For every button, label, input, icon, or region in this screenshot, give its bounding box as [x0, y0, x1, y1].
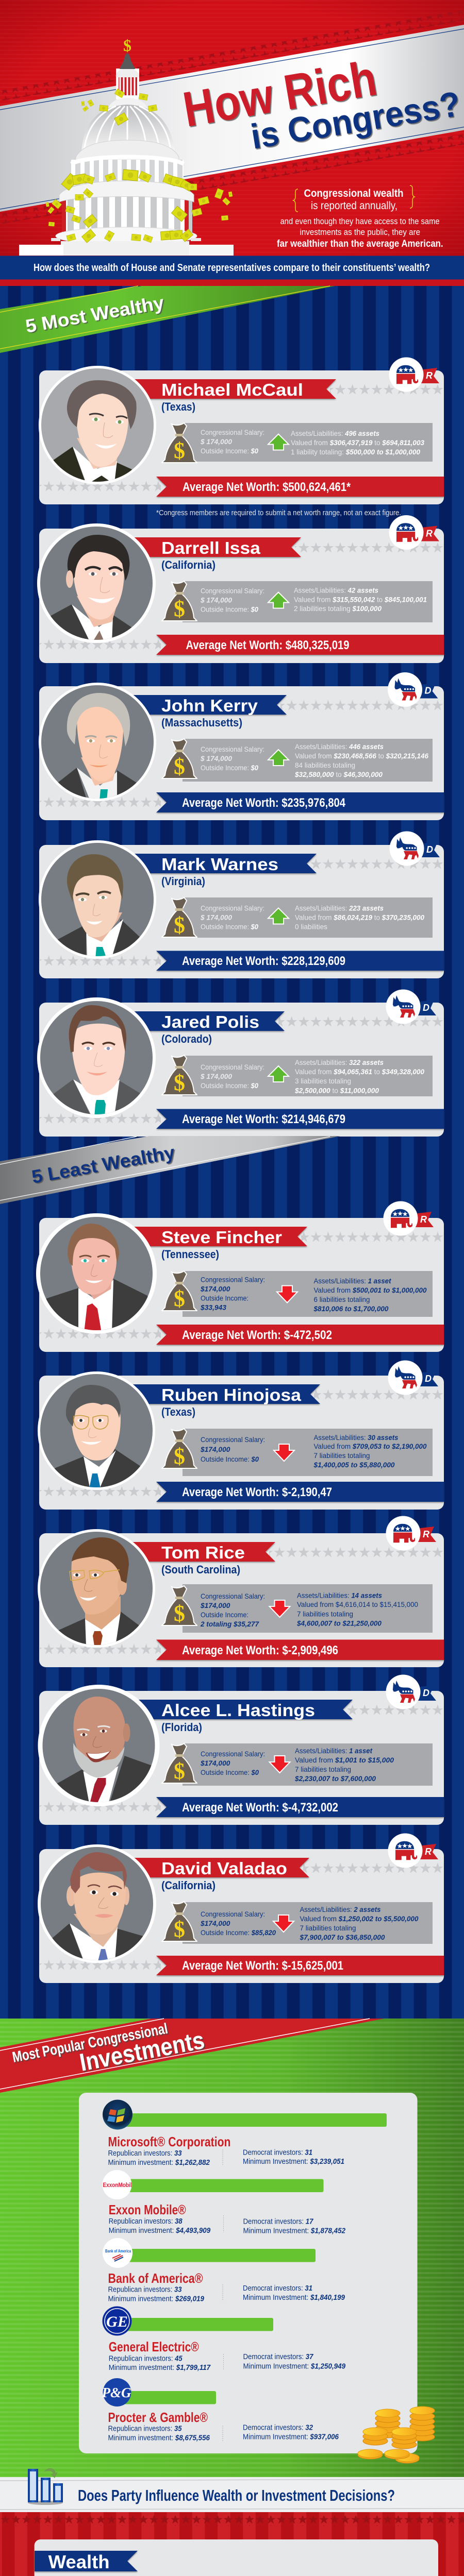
name banner	[131, 1700, 353, 1720]
logo: Bank of America	[103, 2238, 132, 2268]
state: (Texas)	[161, 400, 195, 413]
portrait	[36, 363, 159, 487]
logo: GE	[102, 2306, 132, 2336]
name banner	[131, 695, 287, 715]
net worth banner	[156, 1482, 444, 1502]
green investments section background	[0, 2019, 464, 2477]
intro text block: Congressional wealth	[304, 188, 403, 199]
diagonal white title banner	[0, 25, 464, 212]
info panel: Outside Income: $0	[201, 605, 258, 613]
company: Bank of America: Minimum Investment: $1,840,199	[243, 2293, 345, 2302]
info panel: 0 liabilities	[295, 922, 327, 930]
info panel	[162, 1584, 433, 1633]
company: Microsoft	[103, 2100, 387, 2167]
info panel: Congressional Salary:	[201, 904, 264, 912]
party badge: D	[423, 1003, 429, 1013]
info panel: $7,900,007 to $36,850,000	[300, 1933, 385, 1941]
company: Exxon Mobile: Minimum investment: $4,493,909	[109, 2226, 211, 2235]
info panel: $1,400,005 to $5,880,000	[313, 1461, 395, 1469]
state: (Texas)	[161, 1405, 195, 1418]
party badge	[386, 1674, 436, 1709]
info panel: Valued from $1,001 to $15,000	[295, 1756, 394, 1764]
company: Microsoft: Microsoft® Corporation	[108, 2134, 231, 2149]
info panel: $ 174,000	[200, 437, 232, 446]
info panel	[162, 423, 433, 463]
info panel: 3 liabilities totaling	[295, 1077, 351, 1085]
ribbon: Most Popular Congressional Investments: Most Popular Congressional	[11, 2021, 169, 2066]
net worth banner	[156, 477, 444, 497]
portrait	[37, 1684, 161, 1807]
name banner: Mark Warnes	[161, 855, 278, 874]
name banner: Alcee L. Hastings	[161, 1701, 315, 1720]
card: Jared Polis	[35, 989, 444, 1137]
info panel: $174,000	[200, 1445, 230, 1453]
party badge	[384, 1201, 434, 1235]
info panel: Valued from $1,250,002 to $5,500,000	[300, 1914, 419, 1923]
info panel: $4,600,007 to $21,250,000	[296, 1619, 382, 1627]
logo: P&G	[101, 2378, 131, 2406]
info panel: Outside Income: $0	[201, 922, 258, 930]
net worth banner: Average Net Worth: $-2,909,496	[182, 1643, 338, 1657]
info panel: 1 liability totaling: $500,000 to $1,000,000	[291, 448, 420, 456]
title	[179, 50, 463, 157]
info panel: Assets/Liabilities: 42 assets	[294, 586, 378, 595]
title: How Rich	[179, 50, 380, 138]
net worth banner	[156, 1797, 444, 1817]
card: Darrell Issa	[35, 515, 444, 663]
party badge	[388, 672, 438, 707]
net worth banner	[156, 1109, 444, 1129]
logo: ExxonMobil	[102, 2170, 132, 2199]
party badge: R	[420, 1214, 427, 1225]
state: (Colorado)	[161, 1032, 212, 1045]
info panel	[162, 739, 433, 782]
ribbon: 5 Least Wealthy: 5 Least Wealthy	[30, 1142, 176, 1188]
info panel: 84 liabilities totaling	[295, 761, 355, 769]
company: Exxon Mobile	[102, 2170, 346, 2235]
card: Ruben Hinojosa	[35, 1360, 444, 1510]
company: Procter & Gamble	[101, 2378, 339, 2442]
party badge	[390, 832, 440, 866]
party badge: D	[425, 1374, 432, 1384]
ribbon: 5 Most Wealthy: 5 Most Wealthy	[24, 292, 165, 337]
info panel: Valued from $306,437,919 to $694,811,003	[291, 438, 424, 447]
company: Exxon Mobile: Democrat investors: 17	[243, 2217, 313, 2226]
info panel: Valued from $86,024,219 to $370,235,000	[295, 913, 424, 921]
info panel: Congressional Salary:	[201, 1592, 265, 1600]
logo: P&G: P&G	[101, 2385, 131, 2400]
info panel: Assets/Liabilities: 1 asset	[295, 1747, 373, 1755]
info panel: $810,006 to $1,700,000	[313, 1304, 389, 1313]
party badge: D	[425, 685, 431, 696]
net worth banner: Average Net Worth: $-472,502	[182, 1328, 332, 1342]
state: (Massachusetts)	[161, 716, 242, 729]
info panel: Congressional Salary:	[201, 1063, 264, 1071]
info panel: $174,000	[200, 1601, 230, 1609]
question bar	[0, 256, 464, 286]
party badge	[386, 989, 436, 1024]
info panel	[162, 897, 433, 938]
info panel: $2,500,000 to $11,000,000	[294, 1086, 379, 1094]
company: Bank of America: Bank of America®	[108, 2270, 203, 2286]
illustration: gold coins	[358, 2406, 435, 2463]
illustration: capitol dome with money	[19, 36, 234, 256]
company: Procter & Gamble: Democrat investors: 32	[243, 2424, 313, 2432]
logo: ExxonMobil: ExxonMobil	[103, 2181, 132, 2189]
info panel: 7 liabilities totaling	[300, 1924, 356, 1932]
portrait	[35, 1842, 159, 1965]
net worth banner	[156, 1325, 444, 1345]
company: General Electric: Minimum Investment: $1,250,949	[243, 2362, 346, 2371]
info panel: Outside Income: $0	[201, 447, 258, 455]
info panel: Outside Income: $85,820	[201, 1928, 276, 1937]
party badge	[388, 1360, 438, 1395]
info panel: 2 liabilities totaling $100,000	[294, 604, 382, 613]
name banner	[131, 1227, 307, 1247]
net worth banner	[156, 951, 444, 971]
company: Microsoft: Republican investors: 33	[108, 2149, 182, 2158]
company: Microsoft: Minimum Investment: $3,239,051	[243, 2157, 344, 2166]
info panel: Valued from $500,001 to $1,000,000	[313, 1286, 427, 1294]
info panel: Assets/Liabilities: 446 assets	[295, 742, 384, 751]
party badge: R	[425, 1846, 432, 1857]
company: Exxon Mobile: Exxon Mobile®	[109, 2202, 186, 2217]
name banner	[131, 537, 301, 557]
name banner	[131, 1858, 309, 1878]
star row above banner	[0, 10, 464, 102]
info panel: Congressional Salary:	[201, 586, 264, 595]
info panel: 6 liabilities totaling	[313, 1295, 370, 1303]
state: (Tennessee)	[161, 1248, 219, 1261]
name banner: David Valadao	[161, 1859, 287, 1878]
name banner: Steve Fincher	[161, 1228, 282, 1247]
card: Alcee L. Hastings	[37, 1674, 444, 1825]
name banner: Michael McCaul	[161, 380, 303, 399]
info panel: Assets/Liabilities: 496 assets	[291, 429, 379, 437]
company: General Electric: Democrat investors: 37	[243, 2352, 313, 2361]
logo: Microsoft	[103, 2100, 132, 2130]
party badge: D	[423, 1688, 429, 1698]
info panel: Valued from $230,468,566 to $320,215,146	[295, 752, 428, 760]
net worth banner: Average Net Worth: $-15,625,001	[182, 1959, 343, 1973]
state: (Florida)	[161, 1721, 202, 1734]
info panel: $ 174,000	[200, 913, 232, 921]
ribbon: 5 Least Wealthy	[0, 1136, 340, 1204]
info panel: $ 174,000	[200, 1072, 232, 1080]
info panel	[162, 1743, 433, 1786]
info panel	[162, 581, 433, 622]
company: Exxon Mobile: Republican investors: 38	[109, 2217, 183, 2226]
company: Bank of America: Minimum investment: $269,019	[108, 2295, 205, 2303]
info panel: Congressional Salary:	[201, 1910, 265, 1918]
name banner	[131, 1384, 320, 1404]
portrait	[36, 838, 159, 961]
party badge: R	[426, 529, 433, 539]
card: John Kerry	[36, 672, 444, 820]
intro text block: investments as the public, they are	[300, 227, 420, 237]
icon: blue bar chart	[28, 2468, 63, 2505]
info panel: $2,230,007 to $7,600,000	[294, 1774, 376, 1783]
ribbon: Most Popular Congressional Investments: Investments	[77, 2027, 207, 2077]
portrait	[35, 996, 158, 1120]
star row below banner	[0, 133, 464, 225]
card: Tom Rice	[35, 1516, 444, 1667]
info panel: $174,000	[200, 1919, 230, 1927]
net worth banner	[156, 792, 444, 812]
company: Bank of America: Republican investors: 33	[108, 2285, 182, 2294]
star row top	[0, 2516, 464, 2526]
net worth banner: Average Net Worth: $500,624,461*	[183, 480, 351, 494]
ribbon: 5 Most Wealthy	[0, 286, 335, 353]
name banner	[131, 854, 317, 874]
info panel: Assets/Liabilities: 2 assets	[300, 1905, 381, 1913]
ribbon: Wealth	[35, 2551, 138, 2572]
net worth banner	[156, 635, 444, 655]
intro text block: is reported annually,	[311, 200, 397, 212]
portrait	[35, 1212, 158, 1335]
party badge	[389, 515, 439, 550]
info panel: Outside Income: $0	[201, 1455, 259, 1463]
info panel	[162, 1271, 433, 1317]
info panel	[162, 1902, 433, 1944]
info panel: 7 liabilities totaling	[297, 1609, 353, 1618]
name banner: John Kerry	[161, 696, 258, 715]
logo: GE: GE	[106, 2313, 128, 2330]
info panel: Outside Income: $0	[201, 764, 258, 772]
party badge	[389, 358, 439, 392]
card: Steve Fincher	[35, 1201, 444, 1352]
red striped background	[0, 2512, 464, 2576]
name banner: Jared Polis	[161, 1012, 259, 1031]
net worth banner: Average Net Worth: $-2,190,47	[182, 1485, 332, 1499]
name banner	[131, 1542, 275, 1562]
info panel: Assets/Liabilities: 322 assets	[295, 1058, 384, 1066]
net worth banner: Average Net Worth: $480,325,019	[186, 638, 350, 652]
name banner	[131, 379, 336, 399]
net worth banner: Average Net Worth: $214,946,679	[182, 1112, 345, 1126]
company: Microsoft: Democrat investors: 31	[243, 2148, 312, 2157]
info panel: Congressional Salary:	[201, 745, 264, 753]
intro text block	[277, 185, 443, 249]
info panel: $33,943	[200, 1303, 226, 1312]
card: Michael McCaul	[36, 358, 444, 504]
info panel: $32,580,000 to $46,300,000	[294, 770, 383, 778]
company: General Electric	[102, 2306, 346, 2372]
portrait	[35, 521, 158, 645]
net worth banner	[156, 1956, 444, 1975]
info panel: Valued from $4,616,014 to $15,415,000	[297, 1600, 418, 1608]
company: Exxon Mobile: Minimum Investment: $1,878,452	[243, 2227, 346, 2235]
portrait	[36, 680, 159, 804]
info panel: Congressional Salary:	[201, 1435, 265, 1444]
heading band: Does Party Influence	[0, 2477, 464, 2512]
name banner: Ruben Hinojosa	[161, 1385, 302, 1404]
info panel: Assets/Liabilities: 223 assets	[295, 904, 384, 912]
portrait	[35, 1527, 158, 1650]
info panel: Valued from $315,550,042 to $845,100,001	[294, 596, 427, 604]
party badge: D	[426, 844, 433, 855]
party badge	[386, 1516, 436, 1551]
info panel	[162, 1055, 433, 1096]
info panel: $ 174,000	[200, 754, 232, 762]
card: David Valadao	[35, 1833, 444, 1983]
info panel: $ 174,000	[200, 596, 232, 604]
company: Bank of America	[103, 2238, 345, 2303]
company: Procter & Gamble: Procter & Gamble®	[108, 2410, 208, 2425]
logo: Bank of America: Bank of America	[105, 2249, 131, 2253]
info panel: Outside Income:	[201, 1611, 248, 1619]
navy striped background	[0, 286, 464, 2019]
info panel: $174,000	[200, 1285, 230, 1293]
party badge	[388, 1833, 438, 1868]
state: (California)	[161, 558, 216, 571]
info panel	[162, 1429, 433, 1476]
illustration: capitol dome with money: $	[123, 36, 131, 55]
info panel: Assets/Liabilities: 30 assets	[313, 1433, 399, 1442]
ribbon: Wealth: Wealth	[48, 2551, 110, 2572]
name banner	[131, 1011, 285, 1031]
company: Procter & Gamble: Minimum investment: $8,675,556	[108, 2434, 210, 2442]
net worth banner	[156, 1639, 444, 1660]
card: Mark Warnes	[36, 832, 444, 978]
info panel: Assets/Liabilities: 1 asset	[313, 1277, 392, 1285]
info panel: 2 totaling $35,277	[200, 1620, 259, 1628]
state: (Virginia)	[161, 875, 205, 888]
info panel: Congressional Salary:	[201, 428, 264, 436]
panel: popular investments	[79, 2093, 418, 2453]
company: General Electric: Minimum investment: $1,799,117	[109, 2363, 211, 2372]
company: Procter & Gamble: Minimum Investment: $937,006	[243, 2433, 339, 2441]
hero background	[0, 0, 464, 286]
net worth banner: Average Net Worth: $228,129,609	[182, 954, 345, 968]
name banner: Darrell Issa	[161, 538, 261, 557]
panel: Wealth	[35, 2539, 438, 2576]
intro text block: and even though they have access to the same	[280, 216, 440, 226]
company: General Electric: Republican investors: 45	[109, 2354, 183, 2363]
net worth banner: Average Net Worth: $235,976,804	[182, 796, 346, 810]
company: Bank of America: Democrat investors: 31	[243, 2284, 312, 2293]
company: Microsoft: Minimum investment: $1,262,882	[108, 2158, 210, 2167]
state: (California)	[161, 1879, 216, 1892]
footnote: *Congress members are required to submit a net worth range, not an exact figure.	[156, 509, 401, 517]
intro text block: far wealthier than the average American.	[277, 239, 443, 249]
info panel: Outside Income: $0	[201, 1768, 259, 1776]
info panel: Congressional Salary:	[201, 1276, 265, 1284]
info panel: Congressional Salary:	[201, 1750, 265, 1758]
net worth banner: Average Net Worth: $-4,732,002	[182, 1801, 338, 1815]
state: (South Carolina)	[161, 1563, 240, 1576]
info panel: Valued from $709,053 to $2,190,000	[313, 1442, 427, 1450]
info panel: 7 liabilities totaling	[295, 1765, 351, 1773]
company: General Electric: General Electric®	[109, 2339, 199, 2354]
name banner: Tom Rice	[161, 1543, 245, 1562]
info panel: Assets/Liabilities: 14 assets	[297, 1591, 382, 1599]
info panel: 7 liabilities totaling	[313, 1451, 370, 1460]
portrait	[35, 1369, 158, 1493]
party badge: R	[426, 370, 433, 381]
info panel: $174,000	[200, 1759, 230, 1767]
company: Procter & Gamble: Republican investors: 35	[108, 2425, 182, 2433]
info panel: Outside Income: $0	[201, 1081, 258, 1090]
ribbon: Most Popular Congressional Investments	[0, 2019, 384, 2093]
info panel: Outside Income:	[201, 1294, 248, 1302]
party badge: R	[423, 1529, 429, 1539]
info panel: Valued from $94,065,361 to $349,328,000	[295, 1067, 424, 1076]
